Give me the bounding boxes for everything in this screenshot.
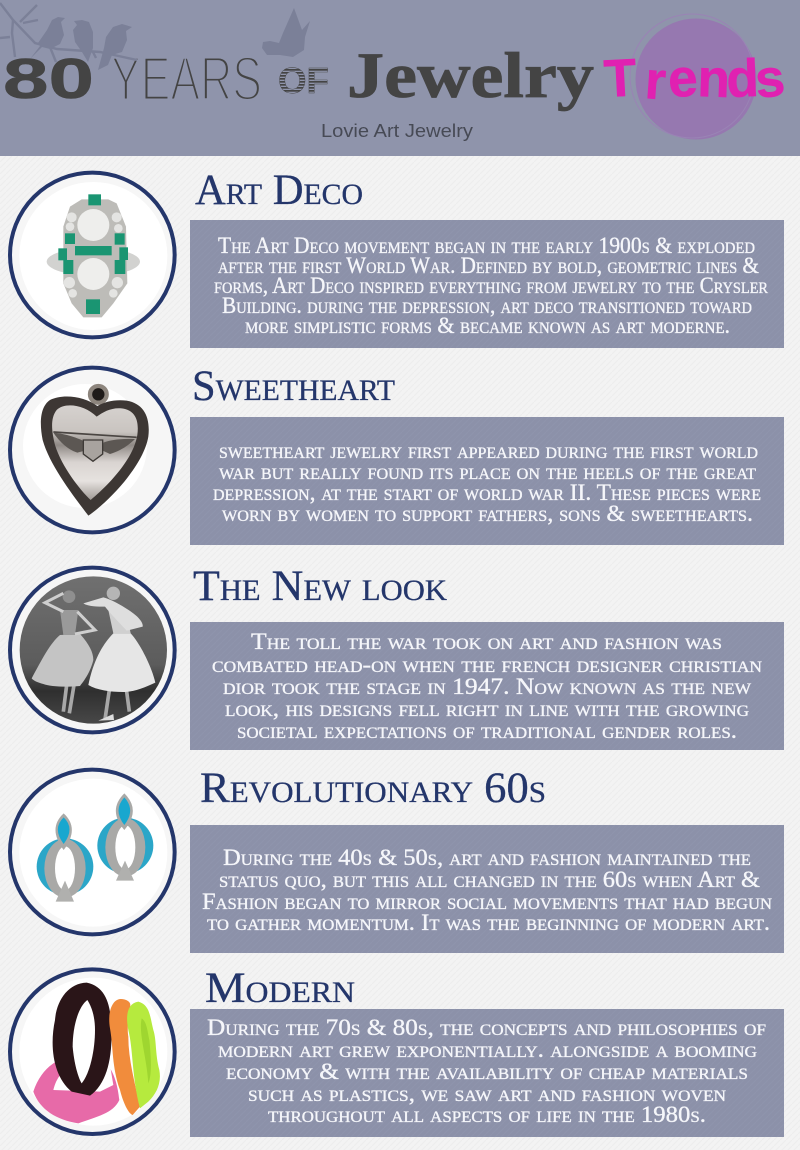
icon: dove: [262, 8, 310, 57]
text panel: societal expectations of traditional gender roles.: [237, 718, 737, 744]
image: plastic bangles: [10, 969, 175, 1134]
text panel: economy & with the availability of cheap materials: [226, 1059, 748, 1085]
image: turquoise earrings: [10, 770, 175, 934]
text panel: war but really found its place on the heels of the great: [219, 459, 756, 485]
section: The New Look: [10, 563, 784, 750]
text panel: throughout all aspects of life in the 1980s.: [268, 1102, 706, 1128]
icon: branch: [0, 3, 137, 62]
heading: The New look: [193, 563, 447, 610]
text panel: During the 40s & 50s, art and fashion maintained the: [223, 845, 751, 871]
text panel: Building. during the depression, art deco transitioned toward: [222, 293, 752, 319]
icon: three birds: [30, 17, 132, 70]
text panel: to gather momentum. It was the beginning of modern art.: [207, 910, 770, 936]
text panel: [190, 622, 784, 750]
header banner: [0, 0, 800, 156]
subtitle: Lovie Art Jewelry: [321, 121, 473, 141]
title: YEARS: [111, 45, 262, 114]
title: OF: [278, 60, 329, 101]
text panel: more simplistic forms & became known as art moderne.: [245, 313, 730, 339]
text panel: The Art Deco movement began in the early 1900s & exploded: [218, 233, 755, 259]
text panel: [190, 1009, 784, 1137]
text panel: worn by women to support fathers, sons & sweethearts.: [222, 501, 753, 527]
purple circle: [630, 14, 756, 140]
text panel: [190, 417, 784, 545]
text panel: [190, 825, 784, 953]
section: Revolutionary 60s: [10, 765, 784, 953]
text panel: [190, 220, 784, 348]
title: 80: [3, 47, 94, 111]
text panel: sweetheart jewelry first appeared during the first world: [219, 438, 758, 464]
title: Jewelry: [347, 40, 594, 112]
section: Sweetheart: [10, 363, 784, 545]
image: sweetheart locket: [10, 368, 175, 532]
text panel: such as plastics, we saw art and fashion woven: [248, 1081, 726, 1107]
text panel: During the 70s & 80s, the concepts and philosophies of: [207, 1015, 766, 1041]
text panel: look, his designs fell right in line with the growing: [225, 696, 749, 722]
section: Modern: [10, 965, 784, 1137]
title: [3, 40, 788, 114]
heading: Art Deco: [195, 167, 363, 214]
text panel: dior took the stage in 1947. Now known as the new: [223, 674, 752, 700]
text panel: modern art grew exponentially. alongside a booming: [218, 1037, 757, 1063]
text panel: depression, at the start of world war II. These pieces were: [213, 480, 761, 506]
text panel: status quo, but this all changed in the 60s when Art &: [219, 867, 760, 893]
heading: Modern: [205, 965, 355, 1012]
text panel: Fashion began to mirror social movements that had begun: [202, 889, 772, 915]
section: Art Deco: [10, 167, 784, 348]
title: Trends: [603, 48, 788, 111]
text panel: combated head-on when the french designer christian: [212, 652, 762, 678]
text panel: The toll the war took on art and fashion was: [251, 629, 722, 655]
heading: Revolutionary 60s: [200, 765, 546, 812]
image: art deco ring: [10, 173, 175, 337]
image: dior new look photo: [10, 568, 175, 732]
heading: Sweetheart: [192, 363, 395, 410]
